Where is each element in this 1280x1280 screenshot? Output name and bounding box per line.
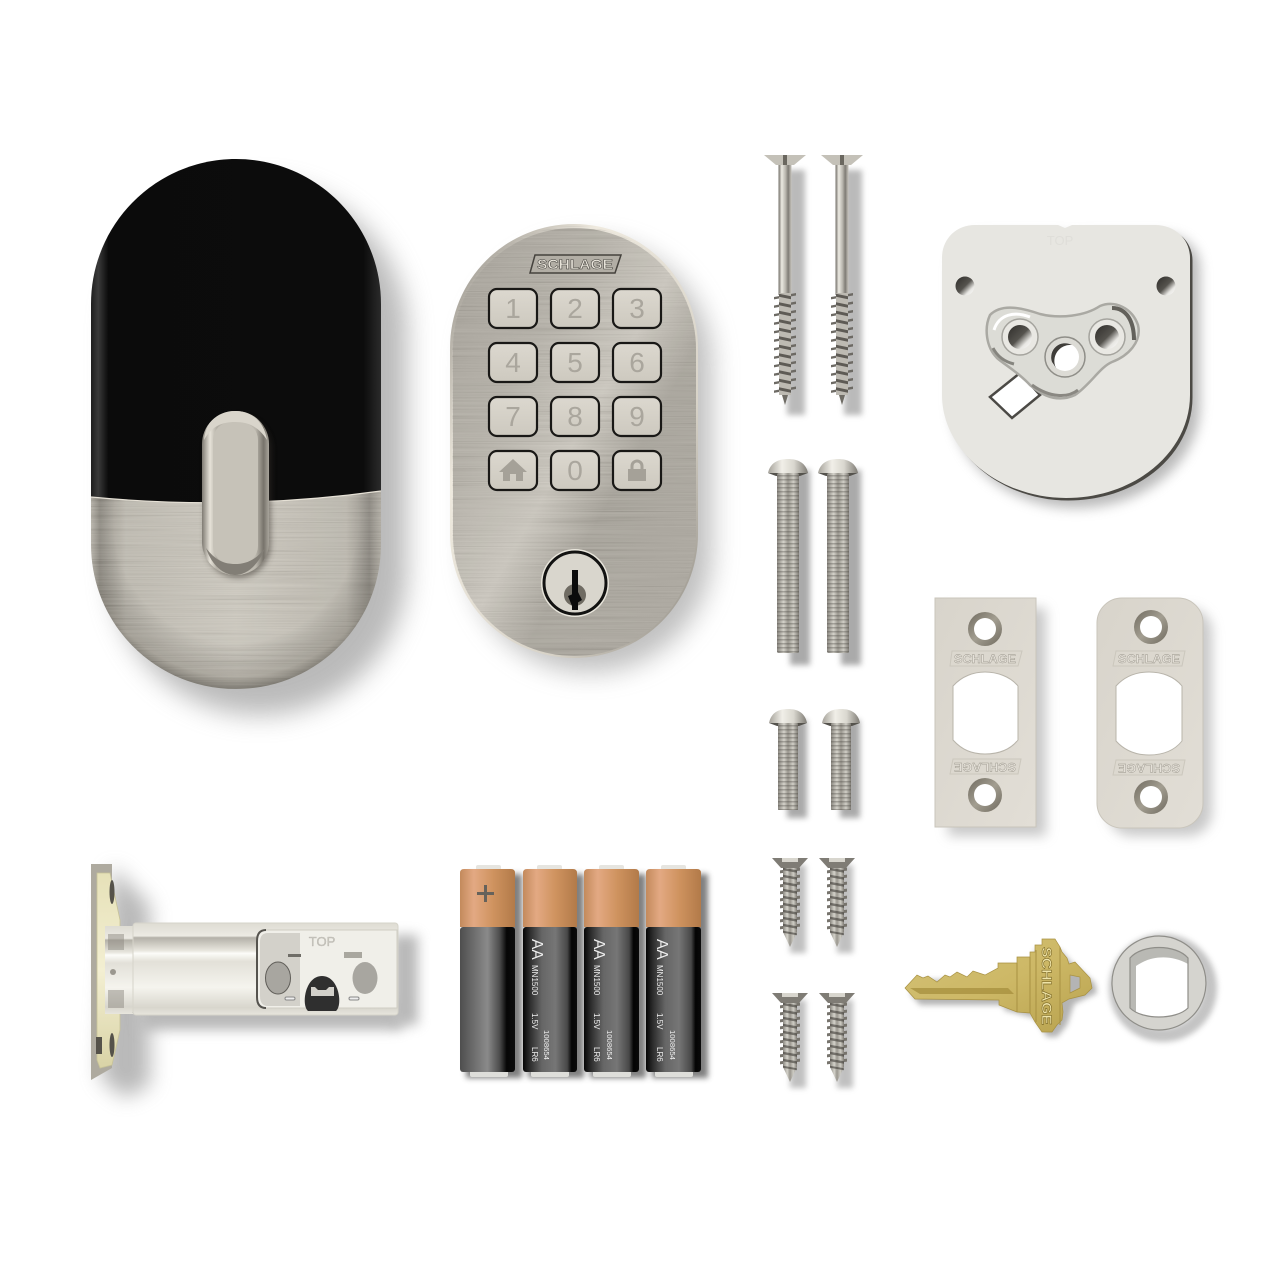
battery 2 [523,865,577,1077]
keypad buttons: 8 [567,401,583,432]
corner holes [956,276,1176,296]
latch case [257,930,397,1008]
keypad buttons: 1 [505,293,521,324]
rounded strike embossed logo bottom: SCHLAGE [1118,761,1180,775]
square strike embossed logo top: SCHLAGE [954,652,1016,666]
battery 2: MN1500 [530,965,539,996]
battery 4: LR6 [655,1047,664,1062]
short machine screw right [822,709,860,810]
key body [905,939,1092,1032]
thumb turn [202,411,271,578]
key groove [910,988,1014,994]
short wood screw lower left [772,993,808,1082]
battery 1 [460,865,515,1077]
keypad buttons: 0 [567,455,583,486]
black battery cover [91,159,381,503]
wire slot [990,373,1040,418]
batteries shadow [466,874,708,1078]
latch brass drive [97,873,120,1068]
key bow ridges [1017,947,1060,1025]
short machine screws [769,709,860,818]
lock drop shadow [112,185,407,715]
latch faceplate [91,864,112,1080]
long machine screw right [818,459,858,653]
keypad buttons: 2 [567,293,583,324]
short wood screw upper right [819,858,855,947]
latch case: TOP [309,934,335,949]
ring face [1112,936,1206,1030]
battery 3 [584,865,639,1077]
short wood screw upper left [772,858,808,947]
icon: lock key [628,460,646,481]
plate dark edge [944,228,1192,500]
strike plate rounded [1097,598,1212,836]
latch spindle hole [305,976,339,1011]
strike plate square [935,598,1046,836]
latch shadows [100,866,418,1098]
interior lock assembly [91,159,407,715]
battery 3: AA [590,939,607,960]
boss hole center [1045,337,1085,377]
screw shadows [790,470,861,665]
long wood screws [764,155,863,415]
battery 4: 1008654 [668,1030,677,1061]
keypad buttons: 9 [629,401,645,432]
keypad buttons: 7 [505,401,521,432]
battery 2: 1.5V [530,1013,539,1030]
trim ring [1112,936,1210,1035]
brass key [905,939,1097,1037]
keypad body [450,224,698,658]
long wood screw right [821,155,863,405]
square strike embossed logo bottom: SCHLAGE [954,760,1016,774]
boss stamping [987,304,1139,398]
deadbolt latch [91,864,418,1098]
short wood screw lower right [819,993,855,1082]
short wood screws [772,858,855,1088]
keypad buttons: 5 [567,347,583,378]
SCHLAGE logo: SCHLAGE [537,256,613,272]
key brand: SCHLAGE [1039,947,1055,1025]
battery 4: MN1500 [655,965,664,996]
TOP mark: TOP [1047,233,1073,248]
key cylinder [541,549,609,617]
square strike shadow [948,608,1046,836]
battery 2: AA [528,939,545,960]
long machine screws [768,459,861,665]
keypad buttons: 3 [629,293,645,324]
square strike face [935,598,1036,827]
icon: home key [499,459,527,481]
short machine screw left [769,709,807,810]
rounded strike bolt opening [1116,672,1182,755]
battery 3: 1.5V [592,1013,601,1030]
battery 2: LR6 [530,1047,539,1062]
screw shadows [787,720,860,818]
nickel lower housing [91,490,381,690]
mounting plate [942,225,1200,508]
rounded strike face [1097,598,1203,828]
battery 4 [646,865,701,1077]
rounded strike shadow [1108,608,1212,836]
square strike screw holes [968,612,1002,812]
rounded strike screw holes [1134,610,1168,814]
keypad buttons: 4 [505,347,521,378]
AA batteries [460,865,708,1078]
exploded product kit illustration [90,155,1220,1105]
keypad buttons: 6 [629,347,645,378]
SCHLAGE logo [530,255,621,273]
square strike bolt opening [953,672,1018,754]
screw shadows [787,170,862,415]
battery 3: MN1500 [592,965,601,996]
battery 3: LR6 [592,1047,601,1062]
ring inner shadow [1130,948,1188,1012]
battery 2: 1008654 [542,1030,551,1061]
keypad drop shadow [468,242,712,672]
exterior keypad assembly [450,224,712,672]
plate face [942,225,1190,498]
rounded strike embossed logo top: SCHLAGE [1118,652,1180,666]
latch mounting screws [96,880,114,1057]
battery 4: 1.5V [655,1013,664,1030]
battery 4: AA [653,939,670,960]
boss hole left [1002,319,1038,355]
key shadow [910,950,1097,1037]
plate shadow [952,235,1200,508]
latch cylinder body [133,923,398,1015]
long wood screw left [764,155,806,405]
long machine screw left [768,459,808,653]
ring shadow [1116,941,1210,1035]
battery 3: 1008654 [605,1030,614,1061]
keypad buttons [489,289,661,490]
boss hole right [1089,319,1125,355]
screw shadows [790,865,853,1088]
latch collar [105,926,135,1014]
